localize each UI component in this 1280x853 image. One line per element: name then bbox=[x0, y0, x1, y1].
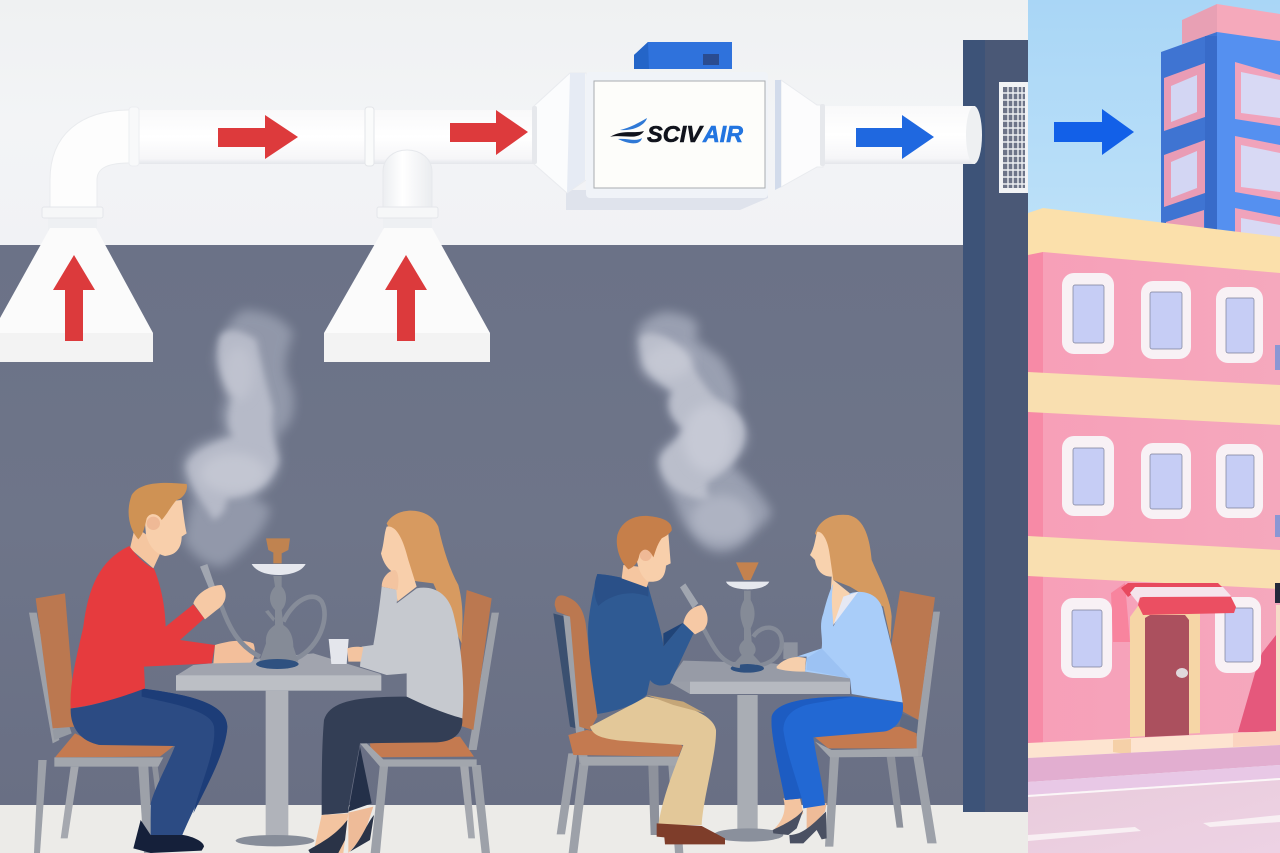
left chair bbox=[29, 593, 175, 853]
hair bbox=[617, 516, 672, 569]
SCIVAIR logo bbox=[610, 118, 743, 147]
arrow: red duct arrow 1 bbox=[218, 115, 298, 159]
left chair bbox=[553, 595, 683, 853]
distant blue building bbox=[1161, 4, 1280, 240]
blue trousers bbox=[771, 697, 903, 808]
woman seated left table bbox=[308, 511, 499, 853]
arrow: red up arrow left hood bbox=[53, 255, 95, 341]
heel feet bbox=[773, 798, 803, 830]
shoes bbox=[657, 823, 725, 844]
neck bbox=[622, 565, 653, 587]
sidewalk and road bbox=[1028, 731, 1280, 853]
smoke plume left bbox=[183, 310, 294, 567]
woman in light blue blouse bbox=[771, 515, 940, 847]
right table bbox=[668, 661, 850, 842]
left table scene bbox=[29, 483, 499, 853]
head bbox=[635, 533, 671, 582]
left transition cone bbox=[532, 73, 586, 193]
vent grille bbox=[999, 82, 1028, 193]
hands bbox=[213, 641, 255, 663]
cup bbox=[329, 639, 349, 664]
feet and heels bbox=[313, 813, 348, 853]
neck and face bbox=[810, 532, 850, 625]
cup bbox=[783, 642, 798, 659]
hair back bbox=[387, 511, 462, 643]
left elbow duct bbox=[50, 110, 130, 210]
sweater bbox=[71, 546, 215, 708]
SCIVAIR logo: AIR bbox=[702, 121, 743, 147]
left table bbox=[176, 653, 381, 846]
arrow: blue clean air arrow 2 bbox=[1054, 109, 1134, 155]
main horizontal duct bbox=[130, 110, 540, 164]
hand on table bbox=[347, 647, 363, 662]
trousers bbox=[590, 697, 716, 825]
front panel bbox=[594, 81, 765, 188]
right chair bbox=[815, 591, 940, 847]
outside street scene panel bbox=[1028, 0, 1280, 853]
smoke plume right bbox=[636, 312, 772, 552]
hoodie bbox=[588, 574, 695, 714]
SCIVAIR logo: SCIV bbox=[647, 121, 704, 147]
door and awning bbox=[1121, 583, 1236, 737]
ductwork bbox=[0, 106, 982, 362]
hookah bbox=[680, 562, 782, 673]
filter housing bbox=[586, 72, 768, 198]
arrow: red up arrow right hood bbox=[385, 255, 427, 341]
right extraction hood bbox=[324, 207, 490, 362]
unit shadow bbox=[566, 190, 768, 210]
filter unit bbox=[532, 42, 825, 210]
right transition cone bbox=[775, 80, 825, 190]
right chair bbox=[360, 590, 499, 853]
jeans bbox=[71, 688, 227, 837]
hookah bbox=[193, 538, 325, 669]
hair bbox=[815, 515, 892, 640]
shoes bbox=[133, 820, 204, 853]
right table scene bbox=[553, 515, 940, 853]
head bbox=[143, 500, 187, 556]
left extraction hood bbox=[0, 207, 153, 362]
man in red sweater bbox=[71, 483, 255, 853]
lounge wall bbox=[0, 245, 965, 807]
trousers bbox=[322, 697, 462, 815]
pink building facade bbox=[1028, 208, 1280, 745]
building column with exhaust vent bbox=[963, 40, 1028, 812]
face and hand bbox=[381, 527, 417, 602]
hair bbox=[129, 483, 187, 539]
outlet duct bbox=[820, 106, 982, 164]
neck bbox=[130, 527, 163, 568]
building windows bbox=[1061, 273, 1263, 678]
blouse bbox=[797, 583, 903, 702]
man in blue hoodie bbox=[588, 516, 725, 844]
sky bbox=[1028, 0, 1280, 240]
blue control box bbox=[634, 42, 732, 69]
floor bbox=[0, 805, 1030, 853]
sweater bbox=[360, 587, 463, 718]
arrow: blue clean air arrow 1 bbox=[856, 115, 934, 159]
upper ceiling background bbox=[0, 0, 1030, 245]
arrow: red duct arrow 2 bbox=[450, 110, 528, 155]
hand bbox=[777, 657, 806, 672]
right branch duct bbox=[383, 150, 432, 210]
